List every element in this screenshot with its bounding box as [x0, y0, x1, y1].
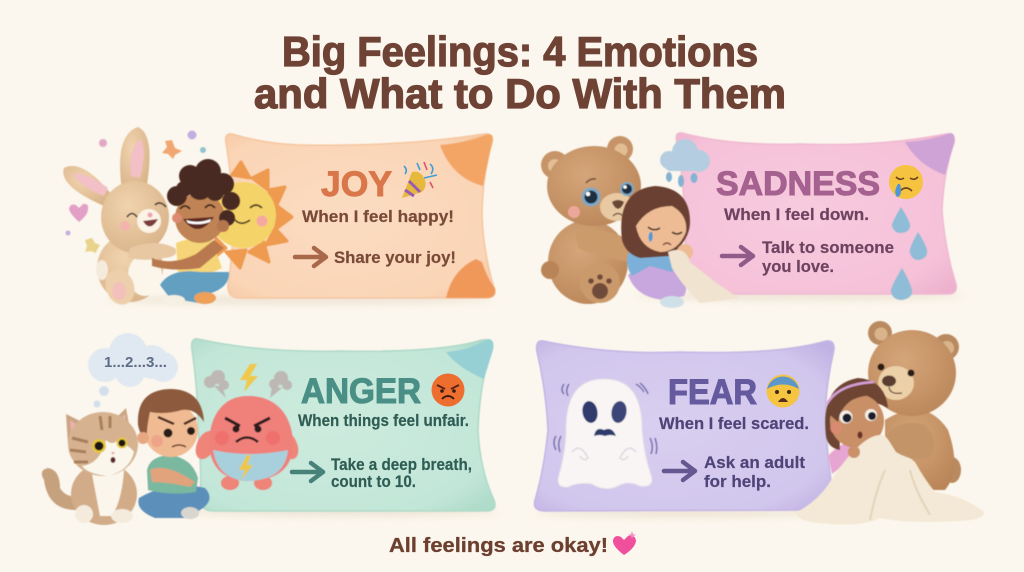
thought cloud text: 1...2...3...: [104, 355, 167, 371]
panel: sadness: [541, 133, 965, 308]
panel: fear: [534, 321, 984, 525]
sadness heading: SADNESS: [716, 165, 880, 203]
fear action: [704, 453, 805, 491]
panel: joy: [63, 127, 495, 309]
icon: angry plush monster: [192, 364, 302, 490]
joy subtitle: When I feel happy!: [302, 207, 454, 226]
fear heading: FEAR: [668, 373, 757, 412]
joy action: Share your joy!: [334, 248, 456, 267]
joy heading: JOY: [321, 165, 392, 204]
anger subtitle: When things feel unfair.: [298, 411, 469, 430]
title: Big Feelings: 4 Emotions: [282, 28, 758, 75]
fear subtitle: When I feel scared.: [659, 414, 809, 433]
fear action: for help.: [704, 472, 771, 491]
icon: crying girl and blanket: [621, 186, 739, 308]
arrow: [295, 248, 326, 266]
arrow: [292, 463, 323, 481]
icon: plush rabbit: [63, 127, 176, 309]
fear pillow: [534, 341, 834, 511]
title: [254, 28, 786, 117]
arrow: [664, 462, 695, 480]
icon: sparkling heart: [613, 531, 636, 555]
icon: felt rain cloud: [660, 139, 710, 187]
anger action: [331, 455, 472, 491]
fear action: Ask an adult: [704, 453, 805, 472]
sadness pillow: [676, 133, 956, 294]
anger action: count to 10.: [331, 472, 416, 491]
sadness subtitle: When I feel down.: [724, 205, 869, 224]
panel: anger: [42, 333, 500, 525]
icon: teddy bear: [868, 321, 961, 490]
icon: angry emoji: [432, 374, 464, 406]
icon: party popper: [402, 162, 437, 198]
icon: thought cloud counting: [88, 333, 178, 408]
anger heading: ANGER: [301, 372, 421, 411]
title: and What to Do With Them: [254, 70, 786, 117]
sadness action: Talk to someone: [762, 238, 894, 257]
icon: plush ghost: [554, 379, 657, 489]
icon: teddy bear: [541, 136, 641, 304]
icon: felt teardrops: [891, 207, 927, 300]
icon: crying emoji: [889, 165, 923, 199]
joy pillow: [226, 134, 495, 298]
closing message: All feelings are okay!: [389, 534, 608, 557]
bear arm holding blanket: [886, 423, 934, 459]
icon: angry boy: [137, 389, 209, 519]
icon: laughing child: [152, 159, 240, 305]
arrow: [722, 247, 753, 265]
icon: worried kitten: [42, 408, 138, 525]
icon: plush blanket: [795, 435, 984, 525]
sadness action: you love.: [762, 257, 834, 276]
icon: scared girl: [825, 378, 888, 474]
sadness action: [762, 238, 894, 276]
anger pillow: [192, 339, 495, 511]
icon: plush sun: [210, 162, 292, 268]
icon: scared emoji: [766, 374, 800, 408]
anger action: Take a deep breath,: [331, 455, 472, 474]
decorations: hearts and stars: [66, 130, 206, 253]
